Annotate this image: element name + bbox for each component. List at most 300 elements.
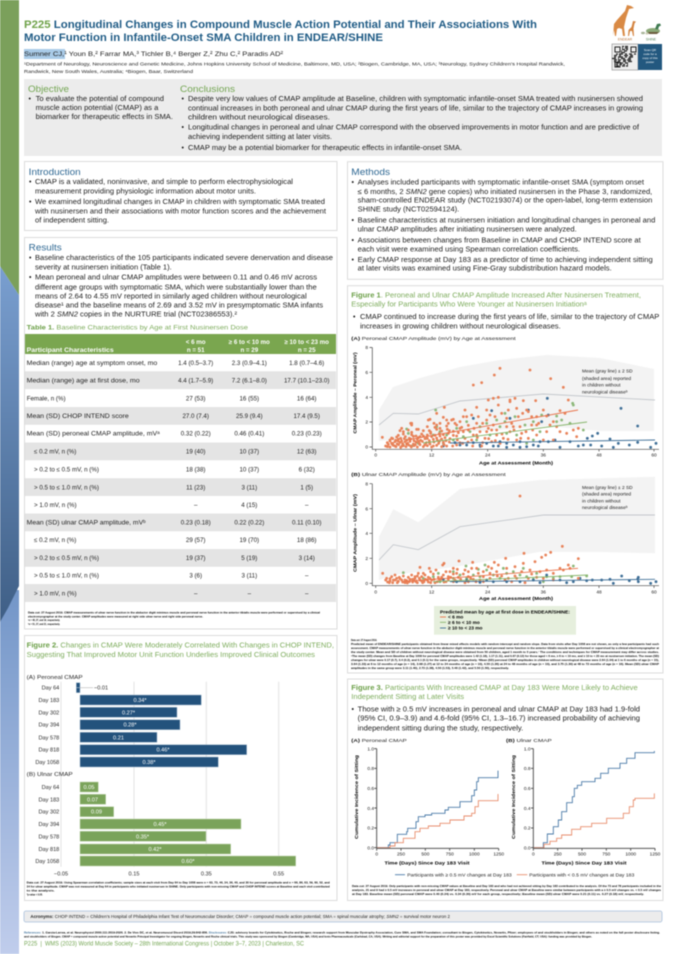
legend: predicted mean by age: Predicted mean by age at first dose in ENDEAR/SHINE: [440,610,570,616]
table 1 body: 25.9 (9.4) [236,413,263,420]
text block: conclusions: CMAP may be a potential biomarker for therapeutic effects in infantile-onset SMA. [188,145,462,152]
bars: ulnar CMAP: 0.45* [153,822,167,828]
y tick labels: 0.0 [524,845,531,851]
table 1 body: 0.23 (0.23) [292,431,322,438]
tick labels: 12 [429,453,435,459]
bars: ulnar CMAP: 0.42* [148,847,162,853]
table 1 header: n = 51 [187,347,205,354]
panel: methods [348,162,663,279]
figure 1 title: Especially for Participants Who Were Younger at Nusinersen Initiationᵃ [351,299,587,308]
annotation: normative mean [582,368,633,396]
figure 1 title: Figure 1. Peroneal and Ulnar CMAP Amplitude Increased After Nusinersen Treatment, [351,291,641,300]
acronyms bar [24,911,662,922]
y tick labels: 0.4 [524,806,531,812]
table 1 body: 1.4 (0.5–3.7) [178,360,213,367]
table 1 header [25,334,336,354]
scatter chart: ulnar CMAP [352,477,659,602]
y tick labels: 0.6 [524,786,531,792]
x tick labels: 1250 [650,852,661,858]
table 1 header: ≥ 10 to < 23 mo [284,339,329,346]
axis titles [352,352,553,466]
table 1 body: – [305,502,309,509]
heading: methods: Methods [351,167,390,178]
axes [370,484,659,588]
axis titles: CMAP Amplitude – Ulnar (mV) [352,494,358,572]
text block: objective: To evaluate the potential of compound [36,96,164,103]
table 1 body: 16 (64) [297,395,317,402]
text block: introduction: measurement providing physiologic information about motor units. [35,188,256,195]
QR call-to-action: code for a [643,52,657,56]
table 1 body: 0.11 (0.10) [292,520,321,526]
figure 3 bullet: Those with ≥ 0.5 mV increases in peroneal and ulnar CMAP at Day 183 had 1.9-fold [358,706,640,713]
tick labels: 36 [541,453,546,459]
tick labels [365,345,657,459]
table 1 body: 19 (37) [186,555,206,562]
x tick labels: 250 [397,852,405,858]
table 1 body: 1 (5) [300,484,313,491]
text block: methods: ≤ 6 months, 2 SMN2 gene copies) who initiated nusinersen in the Phase 3, randomized, [358,189,652,196]
bars: peroneal CMAP: Day 818 [38,748,59,754]
bars: peroneal CMAP: Day 394 [38,723,59,729]
QR call-to-action: poster [646,60,654,64]
figure 3 title: Independent Sitting at Later Visits [351,692,464,701]
table 1 body: – [305,590,309,598]
bars: ulnar CMAP: Day 302 [38,810,59,816]
tick labels: 2 [365,420,368,426]
figure 1 footnotes: amplitudes in the same group were 3.11 (1.40), 2.73 (1.38), 4.50 (1.53), 5.46 (1.42), and 5.50 (1.50), respectively. [351,666,509,670]
tick labels: 48 [596,453,602,459]
tick labels: 6 [365,506,368,512]
annotation: normative mean [582,485,633,511]
table 1 footnotes: ᵇn = 51, 27, and 21, respectively. [28,622,60,626]
annotation: normative mean: Mean (gray line) ± 2 SD [582,368,633,374]
line chart: peroneal cumulative incidence [354,746,504,866]
bars: peroneal CMAP: −0.01 [94,686,108,692]
axis titles: Age at Assessment (Month) [479,596,553,602]
left decorative band [0,0,19,954]
legend: predicted mean by age [434,606,576,635]
figure 2 title: Suggesting That Improved Motor Unit Function Underlies Improved Clinical Outcomes [27,650,315,659]
x axis labels [54,871,284,877]
text block: methods: • [352,237,354,244]
panel: figure 2 [24,636,337,900]
tick labels: 0 [374,453,377,459]
figure 1 bullet: CMAP continued to increase during the first years of life, similar to the trajectory of CMAP [360,314,660,321]
bars: peroneal CMAP: 0.38* [142,760,156,766]
title: P225 Longitudinal Changes in Compound Muscle Action Potential and Their Associations With [24,19,537,31]
figure 2 title: Figure 2. Changes in CMAP Were Moderately Correlated With Changes in CHOP INTEND, [27,641,334,650]
x axis labels: 0.35 [201,871,212,877]
text block: methods: • [352,217,354,224]
chart label A: (A) Peroneal CMAP [351,738,407,744]
table 1 body: > 1.0 mV, n (%) [34,502,77,509]
text block: methods: at later visits was examined using Fine-Gray subdistribution hazard models. [358,266,612,273]
table 1 body: 0.32 (0.22) [181,431,211,438]
annotation: normative mean: (shaded area) reported [582,492,631,498]
x tick labels: 500 [578,852,586,858]
data points [383,496,656,583]
acronyms bar: Acronyms: CHOP INTEND = Children's Hospital of Philadelphia Infant Test of Neuromuscular Disorder; CMAP = compound muscle action potential; SMA = spinal muscular atrophy; SMN2 = survival motor neuron 2 [30,914,450,920]
figure 1 bullet [353,314,660,330]
table 1 body: 16 (55) [239,395,259,402]
tick labels: 24 [485,453,491,459]
tick labels: 8 [365,481,368,487]
axis titles: Cumulative Incidence of Sitting [511,755,517,839]
text block: objective: muscle action potential (CMAP) as a [36,105,158,112]
table 1 body: 6 (32) [299,466,315,473]
trend lines [407,410,655,443]
bars: peroneal CMAP: Day 1058 [35,760,59,766]
figure 2 footnotes: *p-value < 0.05. [27,892,43,896]
figure 1 footnotes: Data cut: 27 August 2019. [351,638,377,642]
y tick labels [524,746,531,851]
text block: methods: Baseline characteristics at nusinersen initiation and longitudinal changes in peroneal and [358,217,655,224]
text block: conclusions: • [182,124,184,131]
text block: conclusions: achieving independent sitting at later visits. [188,134,332,141]
y tick labels: 0.2 [367,826,374,832]
text block: conclusions: Despite very low values of CMAP amplitude at Baseline, children with symptomatic infantile-onset SMA treated with nusinersen showed [188,96,643,103]
table 1 body: 3 (14) [299,555,315,562]
text block: methods: • [352,179,354,186]
text block: objective: • [28,96,32,103]
table 1 body: > 0.5 to ≤ 1.0 mV, n (%) [34,573,99,580]
tick labels: 0 [374,589,377,595]
bars: ulnar CMAP: 0.09 [91,810,102,816]
table 1 body: – [194,502,198,509]
y tick labels: 0.2 [524,826,531,832]
text block: conclusions: • [182,96,184,103]
scatter chart: peroneal CMAP [352,345,659,466]
text block: results: • [29,275,32,282]
bars: ulnar CMAP: Day 1058 [35,859,59,865]
icon: SHINE ducks logo [641,24,661,42]
tick labels: 60 [651,453,657,459]
table 1 body: 10 (37) [239,448,259,455]
table 1 body: Mean (SD) CHOP INTEND score [27,413,129,420]
bars: peroneal CMAP: Day 302 [38,710,59,716]
text block: methods: Analyses included participants with symptomatic infantile-onset SMA (symptom onset [358,179,644,186]
footer citation: P225 | WMS (2023) World Muscle Society – 28th International Congress | October 3–7, 2023 | Charleston, SC [24,941,305,947]
text block: results: Baseline characteristics of the 105 participants indicated severe denervation and disease [35,255,333,262]
table 1 body: 3 (11) [241,484,257,491]
authors [24,49,284,59]
text block: conclusions: • [182,145,184,152]
figure 3 bullet: • [352,706,354,713]
figure 1 title [351,291,641,308]
text block: introduction: with nusinersen and their associations with motor function scores and the achievement [34,208,326,215]
icon: SHINE ducks logo: SHINE [646,38,657,42]
table 1 body: 4.4 (1.7–5.9) [178,378,213,384]
table 1 body: 29 (57) [186,537,206,544]
bars: ulnar CMAP: Day 183 [38,797,59,803]
table 1 body: 7.2 (6.1–8.0) [232,378,267,384]
y tick labels: 1.0 [367,746,374,752]
annotation: normative mean: (shaded area) reported [582,376,631,382]
x tick labels: 250 [554,852,562,858]
figure 1 footnotes: the study center. Mean and SD of children without neurological disease were obtained from 50 children, aged 1 month to 5 years.¹ The conditions and techniques for CMAP measurement may differ across studies. [351,650,659,654]
figure 1 footnotes: assessment. CMAP measurements of ulnar nerve function in the abductor digiti minimus muscle and peroneal nerve function in the anterior tibialis muscle were performed or supervised by a clinical electromyographer at [351,646,659,650]
table 1 body [25,360,336,602]
table 1 body: 27 (53) [186,395,206,402]
table 1 body: Median (range) age at first dose, mo [27,378,140,384]
text block: methods: ulnar CMAP amplitudes after initiating nusinersen were analyzed. [358,227,577,234]
table 1 header: Participant Characteristics [27,347,114,354]
annotation: normative mean: neurological diseaseᵇ [582,390,628,396]
affiliations: Randwick, New South Wales, Australia; ⁴Biogen, Baar, Switzerland [24,69,194,74]
bars: ulnar CMAP: 0.05 [84,785,94,791]
heading: conclusions: Conclusions [180,84,235,95]
table 1 footnotes [28,610,320,626]
table 1 body: ≤ 0.2 mV, n (%) [34,448,76,455]
text block: introduction: CMAP is a validated, noninvasive, and simple to perform electrophysiological [35,179,293,186]
x tick labels: 750 [602,852,611,858]
chart label B: (B) Ulnar CMAP [506,738,552,744]
text block: results: severity at nusinersen initiation (Table 1). [35,265,172,272]
tick labels: 0 [365,581,368,587]
y tick labels: 0.0 [367,845,374,851]
legend: figure 3 [395,872,635,878]
table 1 body: Mean (SD) ulnar CMAP amplitude, mVᵇ [27,520,146,526]
references and disclosures [24,930,660,938]
text block: introduction [29,179,326,225]
table 1 header: n = 25 [298,347,316,354]
table 1 body: 19 (70) [239,537,259,544]
chart label B: (B) Ulnar CMAP Amplitude (mV) by Age at Assessment [351,472,507,478]
table 1 body: 11 (23) [186,484,205,491]
y tick labels: 1.0 [524,746,531,752]
text block: conclusions [182,96,643,152]
axis titles: CMAP Amplitude – Peroneal (mV) [352,352,358,433]
figure 3 title: Figure 3. Participants With Increased CMAP at Day 183 Were More Likely to Achieve [351,683,638,692]
x tick labels: 500 [421,852,430,858]
figure 3 title [351,683,638,701]
text block: objective: biomarker for therapeutic effects in SMA. [36,114,173,121]
bars: ulnar CMAP: Day 394 [38,822,59,828]
figure 1 footnotes: Predicted mean of ENDEAR/SHINE participants obtained from linear mixed effects models with random intercept and random slope. Data from visits after Day 1058 are not shown, as only a few participants had such [351,642,659,646]
table 1 body: 3 (11) [241,573,257,580]
table 1 body: 17.7 (10.1–23.0) [284,378,329,384]
icon: ENDEAR giraffes logo: ENDEAR [618,38,633,42]
figure 3 footnotes: at Day 183. Baseline mean (SD) peroneal CMAP were 0.40 (0.24) vs. 0.34 (0.30) mV for each group, respectively; Baseline mean (SD) ulnar CMAP were 0.21 (0.11) vs. 0.27 (0.18) mV, respectively. [352,892,644,896]
x tick labels: 750 [446,852,454,858]
tick labels: 24 [485,589,491,595]
figure 1 bullet: increases in growing children without neurological diseases. [360,323,561,330]
text block: introduction: • [29,199,32,206]
bars: ulnar CMAP: 0.07 [87,797,98,803]
table 1 body: 10 (37) [239,466,259,473]
table 1 body: 3 (6) [189,573,202,580]
heading: results: Results [29,243,62,254]
trend lines [403,568,655,582]
figure 2 footnotes: 34 for ulnar amplitude. CMAP was not measured at Day 64 in participants who initiated nusinersen in SHINE. Only participants with non-missing CMAP and CHOP INTEND scores at Baseline and each visit contributed [27,884,330,888]
text block: results: with 2 SMN2 copies in the NURTURE trial (NCT02386553).² [34,312,238,319]
annotation: normative mean: in children without [582,498,621,504]
y tick labels: 0.4 [367,806,374,812]
table 1 body: ≤ 0.2 mV, n (%) [34,537,76,544]
heading: introduction: Introduction [29,167,81,178]
tick labels: 6 [365,370,368,376]
panel: objective and conclusions [24,79,662,156]
table 1 body: – [248,590,252,598]
axis titles [354,755,470,866]
table 1 body: – [194,590,198,598]
axes [370,348,659,452]
table 1 footnotes: ᵃn = 48, 27, and 19, respectively. [28,618,60,622]
panel: results [24,238,337,629]
text block: results: different age groups with symptomatic SMA, which were substantially lower than the [35,284,317,291]
bars: peroneal CMAP: 0.21 [113,735,124,741]
x tick labels: 0 [532,852,535,858]
table 1 body: > 1.0 mV, n (%) [34,590,77,598]
y tick labels: 0.8 [524,766,531,772]
axis titles [352,494,553,602]
legend: figure 3: Participants with ≥ 0.5 mV changes at Day 183 [407,872,512,878]
tick labels: 60 [651,589,657,595]
axis titles: Cumulative Incidence of Sitting [354,755,360,839]
bars: peroneal CMAP: Day 183 [38,698,59,704]
tick labels: 8 [365,345,368,351]
text block: conclusions: Longitudinal changes in peroneal and ulnar CMAP correspond with the observed improvements in motor function and are predictive of [188,124,639,131]
text block: methods [352,179,655,273]
icon: ENDEAR giraffes logo [613,5,636,42]
text block: results [29,255,333,319]
text block: conclusions: children without neurological diseases. [188,115,330,122]
bars: peroneal CMAP [35,683,247,767]
bars: peroneal CMAP: Day 64 [42,686,59,692]
table 1 body: Mean (SD) peroneal CMAP amplitude, mVᵃ [27,431,160,438]
figure 2 footnotes [27,881,330,896]
table 1 body: – [305,573,309,580]
QR call-to-action: Scan QR [644,48,657,52]
bars: ulnar CMAP: Day 818 [38,847,59,853]
table 1 body: 2.3 (0.9–4.1) [232,360,267,367]
figure 2 title [27,641,334,659]
bars: peroneal CMAP: 0.28* [123,723,137,729]
tick labels: 4 [365,531,368,537]
title: Motor Function in Infantile-Onset SMA Children in ENDEAR/SHINE [24,32,383,44]
table 1 body: 4 (15) [241,502,257,509]
text block: objective [28,96,173,121]
table 1 body: 0.46 (0.41) [234,431,264,438]
x axis labels: 0.15 [129,871,139,877]
text block: methods: SHINE study (NCT02594124). [358,207,459,214]
figure 3 bullet: (95% CI, 0.9–3.9) and 4.6-fold (95% CI, 1.3–16.7) increased probability of achieving [358,716,640,723]
table 1 body: Female, n (%) [27,395,66,402]
QR call-to-action: copy of this [642,56,658,60]
panel: introduction [24,162,337,230]
table 1 body: 12 (63) [297,448,317,455]
text block: conclusions: continual increases in both peroneal and ulnar CMAP during the first years of life, similar to the trajectory of CMAP increases in growing [188,105,643,112]
text block: introduction: of independent sitting. [35,218,109,225]
table caption: Table 1. Baseline Characteristics by Age at First Nusinersen Dose [27,324,248,332]
axis titles: Age at Assessment (Month) [479,460,553,466]
title [24,19,537,44]
table 1 header: ≥ 6 to < 10 mo [229,339,270,346]
figure 3 bullet: independent sitting during the study, respectively. [358,725,523,732]
table 1 body: 0.22 (0.22) [234,520,264,526]
legend: figure 3: Participants with < 0.5 mV changes at Day 183 [529,872,635,878]
figure 1 footnotes: changes for ulnar were 0.17 (0.7), 0.4 (0.2), and 0.1 (0.1) for the same groups, respectively. ᵇMean (SD) peroneal CMAP amplitudes in children without neurological disease were 2.64 (1.04) at 1 to 6 months of age (n = 15), [351,658,659,662]
chart label A: (A) Peroneal CMAP Amplitude (mV) by Age at Assessment [351,336,517,342]
table 1 footnotes: electromyographer at the study center. CMAP amplitudes were measured at right side ulnar nerve and right side peroneal nerve. [28,614,203,618]
line chart: ulnar cumulative incidence [511,746,661,866]
references and disclosures: References: 1. Garcia-Larrea, et al. Neurophysiol 2000;111:2019-2026. 2. De Vivo DC, et al. Neuromuscul Disord 2019;29:842-856. Disclosures: CJS: advisory boards for Cytokinetics, Roche and Biogen; research support from Muscular Dystrophy Association, Cure SMA, and SMA Foundation; consultant to Biogen, Cytokinetics, Novartis, Pfizer; employees of and stockholders in Biogen; and others as noted on the full poster disclosure listing. [24,930,660,934]
figure 3 footnotes: Data cut: 27 August 2019. Only participants with non-missing CMAP values at Baseline and Day 183 and who had not achieved sitting by Day 183 contributed to the analysis. Of the 73 and 78 participants included in the [352,884,662,888]
text block: results: disease¹ and the baseline means of 2.69 and 3.52 mV in presymptomatic SMA infants [35,303,324,310]
table 1 body: Median (range) age at symptom onset, mo [27,360,158,367]
subheading: ulnar CMAP: (B) Ulnar CMAP [27,772,73,778]
x tick labels: 0 [375,852,378,858]
tick labels: 2 [365,556,368,562]
panel: figure 3 [348,679,663,900]
bars: peroneal CMAP: 0.46* [156,748,170,754]
x tick labels: 1000 [469,852,480,858]
x axis labels: 0.55 [273,871,284,877]
axis titles: Time (Days) Since Day 183 Visit [384,860,470,866]
bars: ulnar CMAP: 0.60* [181,859,195,865]
bar chart: correlations [27,675,296,877]
QR code [612,44,638,70]
figure 3 footnotes [352,884,662,896]
heading: objective: Objective [28,84,69,95]
axis titles: Time (Days) Since Day 183 Visit [542,860,627,866]
authors: Sumner CJ,¹ Youn B,² Farrar MA,³ Tichler B,⁴ Berger Z,² Zhu C,² Paradis AD² [24,51,284,58]
text block: results: • [29,255,32,262]
table 1 header: < 6 mo [186,339,206,346]
x axis labels: −0.05 [54,871,68,877]
figure 2 footnotes: to the analysis. [27,888,55,892]
tick labels: 36 [541,589,546,595]
x tick labels [532,852,661,858]
text block: methods: sham-controlled ENDEAR study (NCT02193074) or the open-label, long-term extension [358,197,652,204]
affiliations: ¹Department of Neurology, Neuroscience and Genetic Medicine, Johns Hopkins University School of Medicine, Baltimore, MD, USA; ²Biogen, Cambridge, MA, USA; ³Neurology, Sydney Children's Hospital Randwick, [24,62,565,67]
panel: figure 1 [348,286,663,673]
y tick labels [367,746,374,851]
table 1 body: 18 (38) [186,466,206,473]
table 1 body: 0.23 (0.18) [181,520,211,526]
tick labels: 12 [429,589,435,595]
annotation: normative mean: neurological diseaseᵇ [582,505,628,511]
bars: ulnar CMAP: Day 64 [42,785,59,791]
text block: introduction: We examined longitudinal changes in CMAP in children with symptomatic SMA treated [35,199,325,206]
affiliations [24,62,565,74]
table 1 body: 5 (19) [241,555,257,562]
tick labels: 4 [365,395,368,401]
legend: predicted mean by age: ≥ 6 to < 10 mo [448,620,480,626]
table 1 header: n = 29 [240,347,259,354]
subheading: peroneal CMAP: (A) Peroneal CMAP [27,675,83,681]
text block: methods: Early CMAP response at Day 183 as a predictor of time to achieving independent sitting [358,257,653,264]
text block: results: Mean peroneal and ulnar CMAP amplitudes were between 0.11 and 0.46 mV across [35,275,318,282]
table 1 body: 18 (86) [297,537,317,544]
figure 2 footnotes: Data cut: 27 August 2019. Using Spearman correlation coefficients; sample sizes at each visit from Day 64 to Day 1058 were n = 63, 73, 46, 34, 36, 40, and 30 for peroneal amplitude and n = 66, 86, 63, 59, 60, 52, and [27,881,330,885]
QR call-to-action [638,44,662,70]
table 1 body: 1.8 (0.7–4.6) [289,360,324,367]
bars: ulnar CMAP: Day 578 [38,834,59,840]
tick labels: 0 [365,445,368,451]
bars: ulnar CMAP [35,782,296,866]
y tick labels: 0.8 [367,766,374,772]
bars: peroneal CMAP: 0.27* [122,710,136,716]
figure 1 footnotes: ᵃThe mean (SD) changes from Baseline at Day 1058 for peroneal CMAP amplitudes were 1.42 (1.18), 1.17 (1.11), and 0.67 (0.12) for those aged < 6 mo, ≥ 6 to < 10 mo, and ≥ 10 to < 23 mo at nusinersen initiation. The mean (SD) [351,654,659,658]
references and disclosures: and stockholders of Biogen. CMAP = compound muscle action potential and Novartis Principal Investigator for ongoing Biogen, Novartis and Roche clinical trials. This study was sponsored by Biogen (Cambridge, MA, USA) and Ionis Pharmaceuticals (Carlsbad, CA, USA). Writing and editorial support for the preparation of this poster was provided by Excel Scientific Solutions (Fairfield, CT, USA): funding was provided by Biogen. [24,934,592,938]
table 1 body: 27.0 (7.4) [182,413,209,420]
y tick labels: 0.6 [367,786,374,792]
figure 1 footnotes [351,638,659,670]
text block: methods: each visit were examined using Spearman correlation coefficients. [358,246,580,253]
annotation: normative mean: Mean (gray line) ± 2 SD [582,485,633,491]
axis titles [511,755,627,866]
